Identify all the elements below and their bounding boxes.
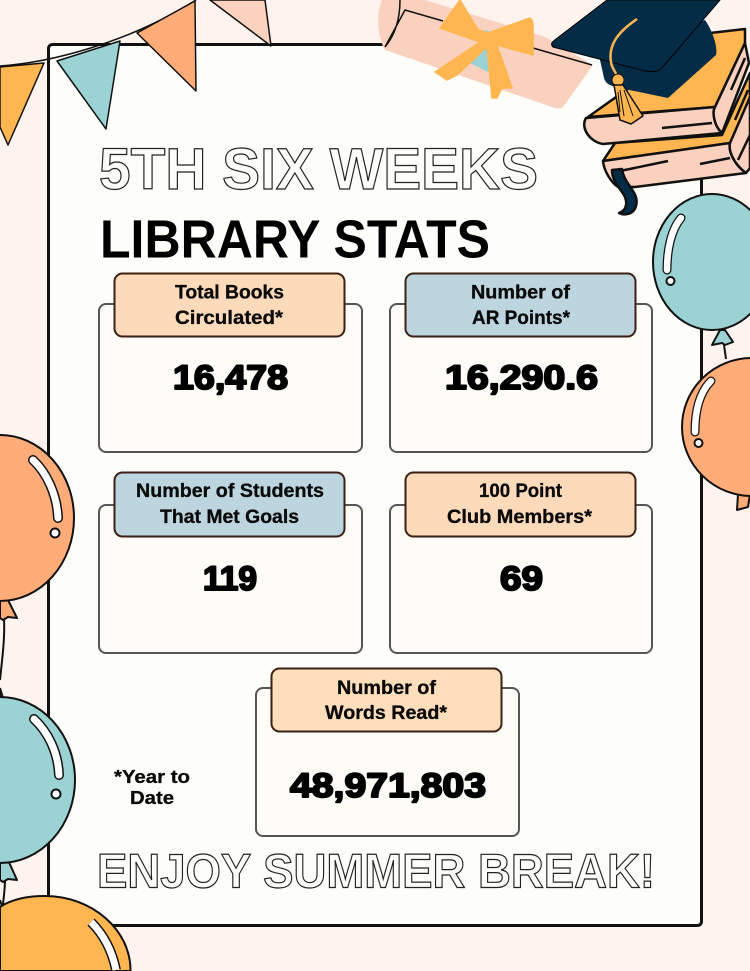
footnote: year to date: *Year to bbox=[114, 767, 190, 787]
card: number of words read bbox=[256, 668, 519, 836]
icon: diploma scroll bbox=[378, 0, 593, 109]
card: students that met goals bbox=[99, 472, 362, 653]
card: total books circulated: Circulated* bbox=[175, 308, 284, 329]
card: total books circulated: Total Books bbox=[175, 282, 284, 304]
balloon: teal left bbox=[0, 697, 75, 925]
card: number of words read: Number of bbox=[337, 678, 437, 699]
footnote: year to date bbox=[114, 767, 190, 808]
card: students that met goals: 119 bbox=[203, 560, 257, 598]
card: number of AR points bbox=[390, 274, 652, 452]
card: students that met goals: Number of Students bbox=[136, 481, 324, 502]
balloon: orange left bbox=[0, 435, 74, 698]
card: total books circulated bbox=[99, 274, 362, 452]
closing message: outlined: ENJOY SUMMER BREAK! bbox=[97, 846, 655, 898]
balloon: orange right bbox=[682, 358, 750, 510]
card: number of AR points: Number of bbox=[471, 282, 571, 304]
card: total books circulated: 16,478 bbox=[173, 359, 288, 397]
footnote: year to date: Date bbox=[130, 788, 174, 808]
card: 100 point club members: 100 Point bbox=[479, 481, 563, 502]
card: 100 point club members bbox=[390, 472, 652, 653]
icon: stacked books bbox=[584, 29, 750, 214]
card: number of AR points: AR Points* bbox=[472, 308, 571, 329]
bunting garland bbox=[0, 0, 271, 145]
card: number of AR points: 16,290.6 bbox=[445, 359, 598, 397]
card: students that met goals: That Met Goals bbox=[160, 507, 299, 528]
card: number of words read: 48,971,803 bbox=[290, 767, 486, 805]
card: 100 point club members: 69 bbox=[500, 560, 543, 598]
card: number of words read: Words Read* bbox=[325, 703, 448, 724]
main panel bbox=[48, 44, 702, 926]
icon: graduation cap bbox=[552, 0, 720, 124]
title: library stats: LIBRARY STATS bbox=[100, 210, 490, 270]
card: 100 point club members: Club Members* bbox=[447, 507, 593, 528]
title: outlined heading: 5TH SIX WEEKS bbox=[99, 137, 538, 202]
balloon: yellow bottom bbox=[0, 896, 131, 971]
balloon: teal right bbox=[653, 194, 750, 359]
